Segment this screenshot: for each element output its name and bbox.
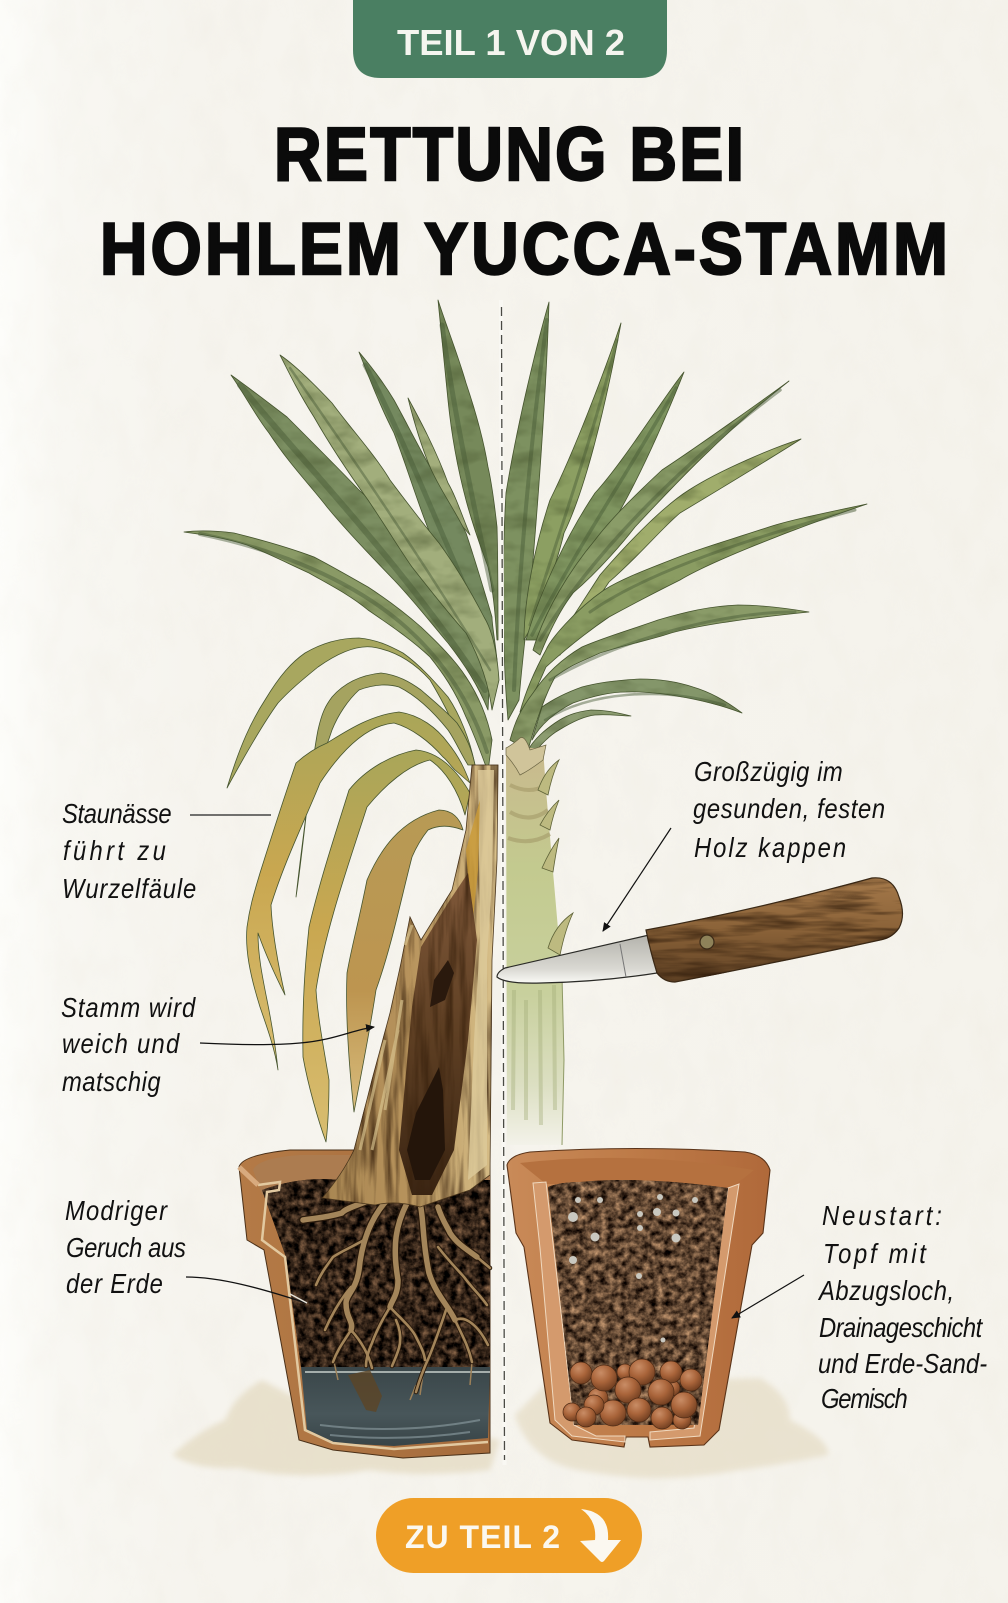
knife blade — [497, 935, 657, 983]
leaf y0 — [227, 638, 475, 788]
callout: cut healthy wood — [603, 755, 885, 931]
leaf l6 — [184, 531, 492, 772]
callout: new start: Topf mit — [823, 1237, 927, 1269]
icon: curved arrow — [580, 1509, 621, 1562]
wilted yucca leaves (left half, green) — [184, 300, 499, 772]
soil — [262, 1179, 490, 1367]
healthy yucca leaves (right half) — [503, 302, 867, 755]
leaf r2 — [524, 323, 621, 640]
hollow rotting trunk (left half) — [322, 765, 498, 1207]
callout: soft trunk: weich und — [62, 1027, 181, 1059]
button: to part 2: ZU TEIL 2 — [405, 1519, 560, 1555]
button: to part 2 — [376, 1498, 642, 1573]
leaf l3 — [280, 355, 499, 710]
callout: waterlogging: Wurzelfäule — [62, 872, 196, 904]
title: RETTUNG BEI — [274, 112, 744, 196]
centre divider: dashed line — [501, 300, 504, 1465]
callout: cut healthy wood: Großzügig im — [694, 755, 843, 787]
callout: musty smell: der Erde — [66, 1267, 163, 1299]
leaf r6 — [520, 504, 867, 712]
perlite specks — [568, 1194, 698, 1342]
stagnant water — [301, 1367, 490, 1446]
callout: waterlogging: Staunässe — [62, 797, 172, 829]
callout: new start — [732, 1199, 987, 1414]
leaf l2 — [359, 352, 497, 680]
fresh soil mix — [548, 1180, 728, 1425]
leaf l5 — [408, 398, 470, 535]
callout: new start: Gemisch — [821, 1382, 908, 1414]
ground stain: left pot — [172, 1380, 500, 1476]
callout: new start: Drainageschicht — [819, 1311, 984, 1343]
leaf y00 — [296, 673, 475, 897]
leaf r1 — [503, 302, 549, 720]
leaf r9 — [528, 710, 631, 755]
right pot: fresh start — [507, 1148, 770, 1447]
knife handle — [646, 878, 902, 982]
callout: cut healthy wood: gesunden, festen — [693, 792, 885, 824]
callout: waterlogging — [62, 797, 271, 904]
callout: new start: Abzugsloch, — [817, 1274, 954, 1306]
callout: soft trunk: Stamm wird — [61, 991, 197, 1023]
top banner: part 1 of 2: TEIL 1 VON 2 — [397, 22, 625, 63]
callout: new start: Neustart: — [822, 1199, 942, 1231]
callout: soft trunk: matschig — [62, 1065, 161, 1097]
ground stain: right pot — [515, 1378, 828, 1478]
leaf y1 — [247, 712, 470, 1070]
cut wall highlights — [258, 1182, 488, 1449]
leaf l1 — [438, 300, 498, 640]
leaf y2 — [303, 750, 470, 1142]
roots — [303, 1197, 490, 1392]
callout: musty smell: Geruch aus — [66, 1231, 186, 1263]
dying yellow leaves — [227, 638, 475, 1142]
top banner: part 1 of 2 — [353, 0, 667, 78]
drainage clay pebbles — [563, 1359, 702, 1429]
healthy trunk (right half) — [506, 738, 573, 1145]
callout: cut healthy wood: Holz kappen — [694, 831, 846, 863]
leaf r4 — [533, 381, 789, 655]
trunk spikes — [538, 760, 573, 955]
leaf l4 — [231, 375, 490, 710]
callout: waterlogging: führt zu — [63, 834, 166, 866]
leaf r8 — [532, 679, 742, 740]
leaf r7 — [510, 605, 809, 750]
title: HOHLEM YUCCA-STAMM — [100, 208, 948, 290]
title — [100, 112, 948, 290]
callout: soft trunk — [61, 991, 374, 1097]
leaf y3 — [347, 810, 463, 1112]
leaf r5 — [545, 439, 801, 660]
knife — [497, 878, 902, 983]
left pot: waterlogged with rot — [239, 1150, 495, 1458]
callout: new start: und Erde-Sand- — [818, 1347, 987, 1379]
leaf r3 — [526, 372, 684, 640]
callout: musty smell: Modriger — [65, 1194, 168, 1226]
callout: musty smell — [65, 1194, 307, 1303]
